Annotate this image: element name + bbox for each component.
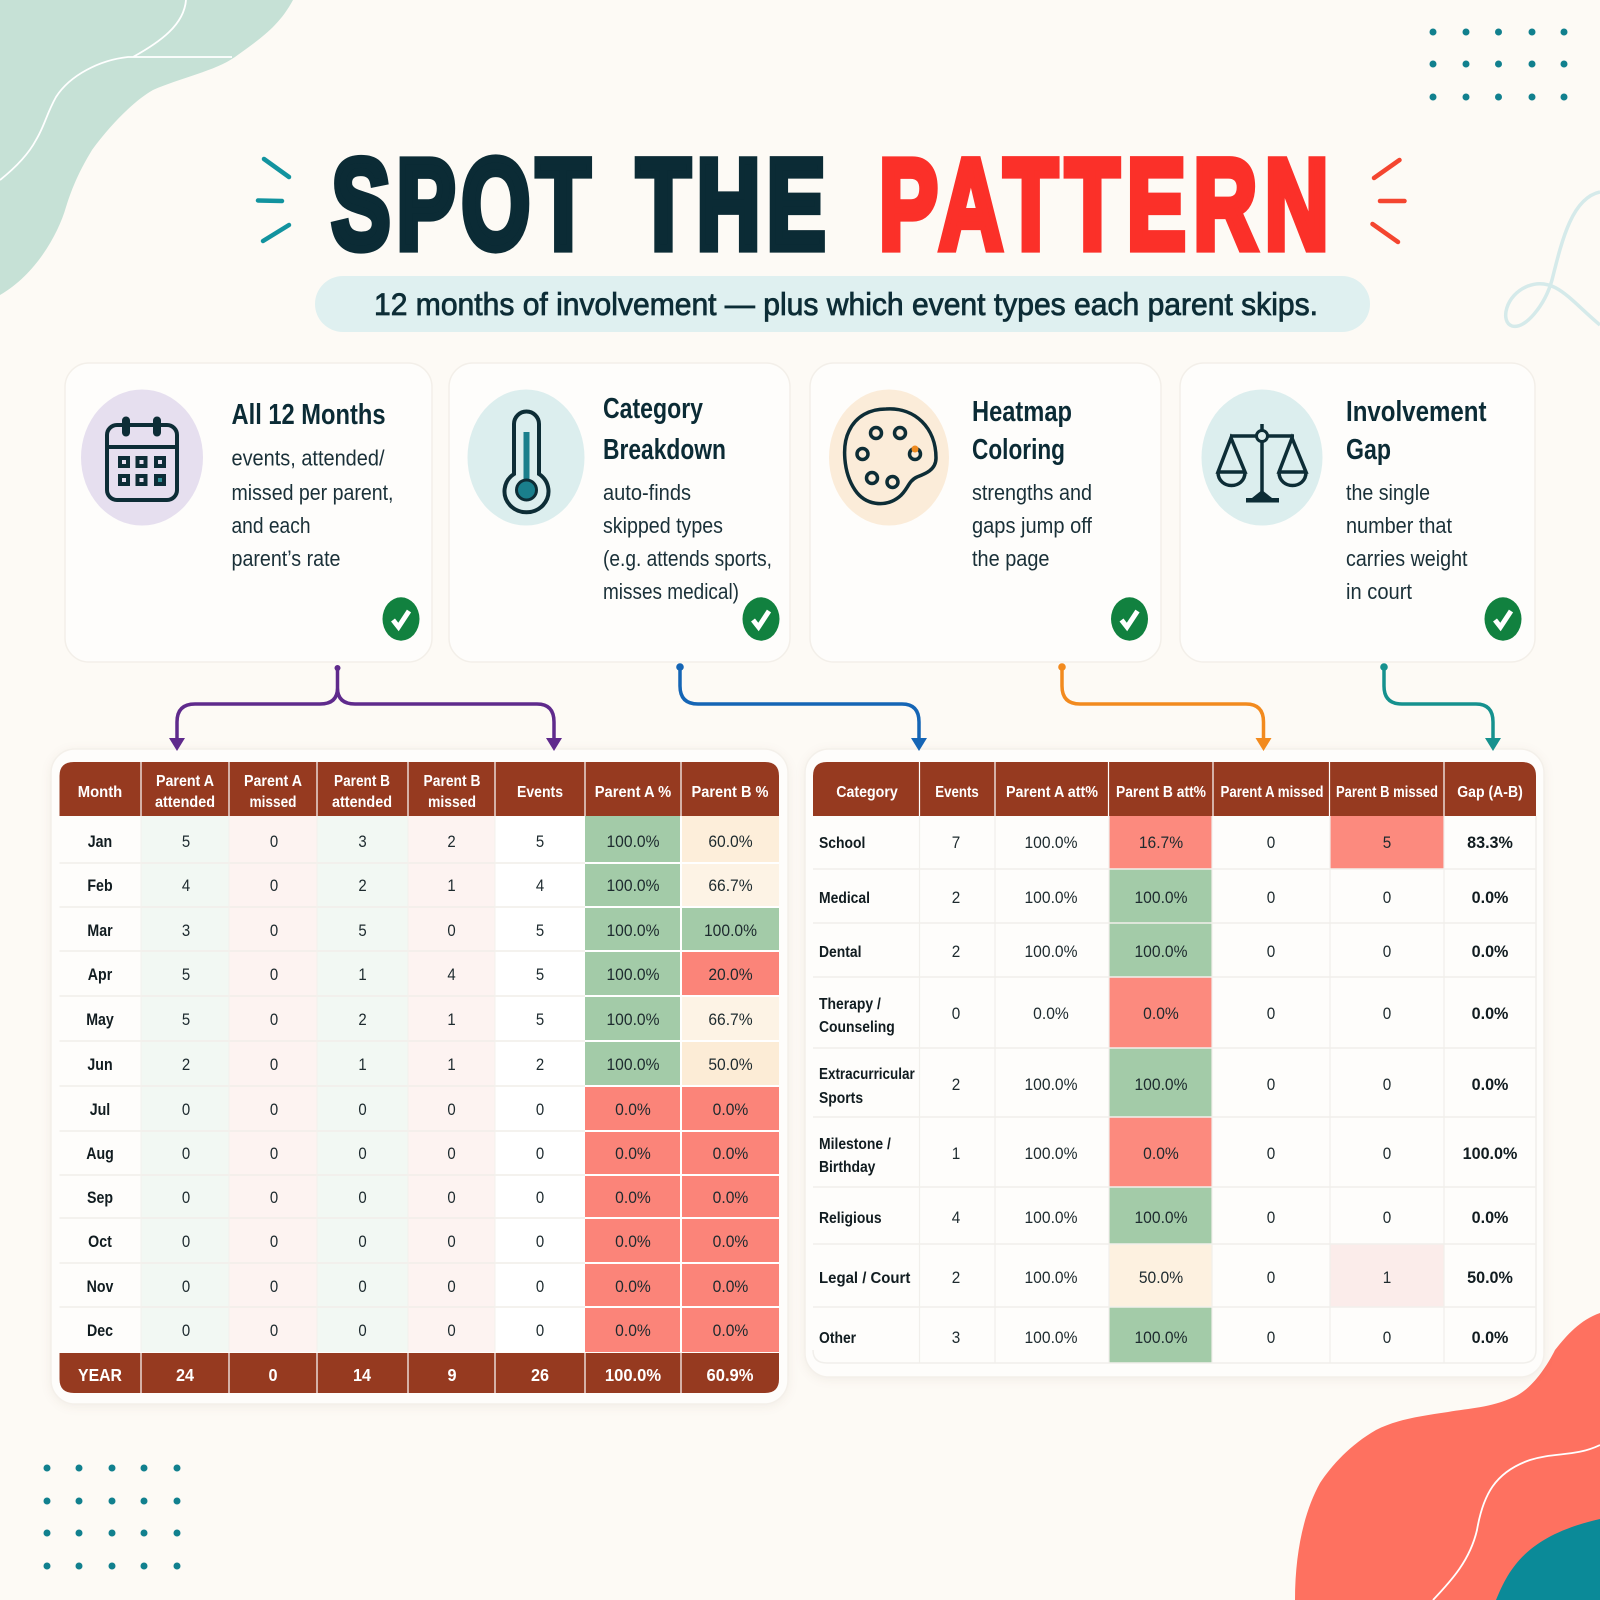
monthly table header row: Parent B [424, 773, 480, 790]
column: gap: 0.0% [1472, 888, 1509, 907]
column: parent a attendance: 0.0% [1033, 1004, 1069, 1023]
column: parent b attended: 0 [358, 1189, 367, 1207]
column: parent a percent: 100.0% [606, 921, 660, 940]
column: parent a percent: 0.0% [615, 1144, 651, 1163]
column: category: Counseling [819, 1018, 895, 1036]
monthly table header row: missed [250, 794, 296, 811]
column: parent b percent: 0.0% [713, 1100, 748, 1119]
panel: all 12 months [65, 363, 432, 662]
text block: missed per parent, [232, 480, 394, 505]
arrow: purple branching connector [169, 665, 562, 751]
column: events: 4 [952, 1208, 960, 1227]
column: category: Religious [819, 1209, 882, 1227]
column: category: Medical [819, 889, 870, 907]
dot grid: top right [1430, 28, 1568, 100]
column: parent b attended: 0 [358, 1322, 367, 1340]
text block: strengths and [972, 480, 1092, 505]
column: category: Milestone / [819, 1135, 892, 1153]
column: parent a missed: 0 [270, 1233, 278, 1251]
monthly table year total row: 100.0% [605, 1364, 661, 1385]
column: parent b missed: 0 [447, 1278, 456, 1296]
column: events: 1 [952, 1144, 960, 1163]
panel: heatmap coloring [810, 363, 1161, 662]
column: parent b missed: 1 [447, 877, 456, 895]
column: events: 0 [536, 1322, 544, 1340]
heading [603, 393, 726, 466]
column: parent a missed [1267, 833, 1275, 1347]
monthly table header row [60, 762, 779, 816]
column: month: Mar [87, 922, 113, 940]
column: parent b missed: 0 [447, 1233, 456, 1251]
column: events: 2 [952, 942, 960, 961]
text block: events, attended/ [232, 446, 385, 470]
column: parent a attendance: 100.0% [1024, 1268, 1078, 1287]
column: parent a missed: 0 [1267, 1075, 1275, 1094]
column: month: Jul [90, 1101, 110, 1119]
heading [972, 396, 1072, 466]
column: parent b attendance: 100.0% [1134, 1208, 1188, 1227]
column: events [536, 833, 544, 1340]
column: parent b percent: 66.7% [708, 1010, 753, 1029]
column: parent a attendance: 100.0% [1024, 1144, 1078, 1163]
column: parent a percent: 0.0% [615, 1321, 651, 1340]
heading [1346, 396, 1487, 466]
panel: involvement gap [1180, 363, 1535, 662]
column: gap [1463, 833, 1518, 1347]
monthly table year total row: 0 [268, 1365, 278, 1385]
column: parent b missed: 5 [1383, 833, 1391, 852]
column: parent a missed [270, 833, 278, 1340]
column: events: 2 [952, 1075, 960, 1094]
column: events: 2 [952, 888, 960, 907]
heading: Breakdown [603, 434, 726, 466]
column: parent a missed: 0 [1267, 1268, 1275, 1287]
column: month: Feb [87, 877, 113, 895]
subtitle pill: 12 months of involvement — plus which event types each parent skips. [374, 286, 1318, 322]
column: events: 4 [536, 877, 544, 895]
column: parent b attendance: 0.0% [1143, 1144, 1179, 1163]
column: parent a missed: 0 [1267, 1004, 1275, 1023]
column: parent b missed [1383, 833, 1391, 1347]
column: parent a attendance: 100.0% [1024, 833, 1078, 852]
heading: All 12 Months [232, 399, 386, 431]
column: parent b attended: 0 [358, 1145, 367, 1163]
column: month: Dec [87, 1322, 113, 1340]
column: parent b attended: 0 [358, 1101, 367, 1119]
column: parent a percent [606, 832, 660, 1340]
heading: Category [603, 393, 703, 425]
column: month [86, 833, 114, 1340]
monthly table header row: Parent A [244, 773, 302, 790]
monthly table year total row: 24 [176, 1365, 194, 1385]
column: parent b missed: 4 [447, 966, 456, 984]
column: events: 5 [536, 922, 544, 940]
icon: red accent ticks [1372, 160, 1404, 242]
column: parent a percent: 100.0% [606, 1010, 660, 1029]
background blob: bottom right coral and teal [1295, 1313, 1600, 1600]
column: parent a percent: 100.0% [606, 876, 660, 895]
column: parent a missed: 0 [270, 966, 278, 984]
column: parent b missed: 0 [1383, 1208, 1391, 1227]
column: parent b attended: 3 [358, 833, 367, 851]
text block: number that [1346, 513, 1452, 538]
subtitle pill [315, 276, 1370, 332]
column: parent b percent: 20.0% [708, 965, 753, 984]
column: parent b attendance: 0.0% [1143, 1004, 1179, 1023]
column: parent a attended: 0 [182, 1101, 190, 1119]
column: parent b percent: 0.0% [713, 1277, 748, 1296]
column: gap: 100.0% [1463, 1144, 1518, 1163]
column: gap: 0.0% [1472, 1075, 1509, 1094]
monthly table header row: attended [332, 794, 392, 811]
column: parent a attended: 5 [182, 833, 190, 851]
background blob: top left mint [0, 0, 293, 295]
column: category: Therapy / [819, 995, 882, 1013]
icon: calendar [81, 390, 203, 526]
column: parent a missed: 0 [270, 1011, 278, 1029]
text block: the page [972, 546, 1050, 571]
text block: auto-finds [603, 480, 691, 505]
text block: gaps jump off [972, 513, 1093, 538]
column: parent a attended: 5 [182, 966, 190, 984]
dot grid: bottom left [44, 1464, 180, 1570]
column: parent b missed: 0 [447, 1101, 456, 1119]
column: parent a attendance: 100.0% [1024, 1328, 1078, 1347]
monthly table header row: missed [428, 794, 476, 811]
heading: Coloring [972, 434, 1065, 466]
column: month: Oct [88, 1233, 112, 1251]
column: parent b percent: 66.7% [708, 876, 753, 895]
monthly table header row: Parent A % [595, 784, 671, 801]
monthly table year total row: 9 [447, 1365, 457, 1385]
column: events: 0 [536, 1145, 544, 1163]
column: parent a percent: 100.0% [606, 1055, 660, 1074]
category table header row: Category [836, 784, 898, 801]
text block: carries weight [1346, 546, 1468, 571]
column: month: Apr [88, 966, 112, 984]
column: parent b missed: 0 [447, 922, 456, 940]
text block: the single [1346, 480, 1430, 505]
column: parent b missed: 1 [1383, 1268, 1391, 1287]
icon: thermometer [468, 390, 584, 526]
monthly table header row: Events [517, 784, 563, 801]
monthly table year total row: YEAR [78, 1365, 122, 1385]
column: parent a attended: 0 [182, 1145, 190, 1163]
column: parent a attended: 0 [182, 1278, 190, 1296]
column: parent b percent [704, 832, 757, 1340]
heading: Gap [1346, 434, 1391, 466]
arrow: orange connector [1058, 663, 1272, 751]
column: parent b missed: 0 [447, 1189, 456, 1207]
column: parent b missed: 0 [1383, 1328, 1391, 1347]
column: parent b percent: 50.0% [708, 1055, 753, 1074]
column: parent a missed: 0 [1267, 1208, 1275, 1227]
column: category: Dental [819, 943, 862, 961]
title word: pattern: PATTERN [879, 133, 1329, 276]
column: parent a attended: 5 [182, 1011, 190, 1029]
column: parent a missed: 0 [270, 922, 278, 940]
column: parent a attended: 0 [182, 1233, 190, 1251]
text block: parent’s rate [232, 546, 340, 571]
column: parent a missed: 0 [270, 1101, 278, 1119]
column: parent b percent: 0.0% [713, 1232, 748, 1251]
category table header row: Parent A missed [1220, 784, 1324, 801]
column: gap: 0.0% [1472, 1328, 1509, 1347]
text block [1346, 480, 1468, 604]
column: parent b missed [447, 833, 456, 1340]
column: parent a missed: 0 [1267, 1144, 1275, 1163]
category table cell heat fills [813, 816, 1536, 1363]
arrow: blue connector [676, 663, 927, 751]
column: events: 0 [536, 1278, 544, 1296]
column: month: Sep [87, 1189, 113, 1207]
column: events: 0 [536, 1189, 544, 1207]
column: parent b attendance: 100.0% [1134, 1328, 1188, 1347]
monthly table header row: attended [155, 794, 215, 811]
category table header row [813, 762, 1536, 816]
panel: category breakdown [449, 363, 790, 662]
column: parent a attended: 0 [182, 1322, 190, 1340]
column: parent a percent: 100.0% [606, 832, 660, 851]
text block [972, 480, 1093, 571]
column: month: Jan [88, 833, 112, 851]
column: parent a attended: 2 [182, 1056, 190, 1074]
column: parent b missed: 1 [447, 1056, 456, 1074]
text block [232, 446, 394, 571]
column: parent b attendance: 100.0% [1134, 888, 1188, 907]
column: parent b attendance: 16.7% [1139, 833, 1183, 852]
column: month: Jun [87, 1056, 113, 1074]
panel: monthly table [51, 749, 788, 1404]
monthly table header row: Parent B [334, 773, 390, 790]
column: parent a missed: 0 [270, 1278, 278, 1296]
column: parent b percent: 0.0% [713, 1144, 748, 1163]
column: events: 5 [536, 833, 544, 851]
column: parent b attendance [1134, 833, 1188, 1347]
column: parent a missed: 0 [1267, 888, 1275, 907]
column: parent b attendance: 50.0% [1139, 1268, 1183, 1287]
monthly table year total row [60, 1353, 779, 1393]
title word: the: THE [636, 133, 826, 276]
column: events: 0 [536, 1233, 544, 1251]
column: category: Other [819, 1329, 856, 1347]
column: parent a missed: 0 [1267, 833, 1275, 852]
column: parent b missed: 0 [1383, 1075, 1391, 1094]
column: events: 0 [952, 1004, 960, 1023]
column: category: Extracurricular [819, 1065, 915, 1083]
text block: (e.g. attends sports, [603, 546, 772, 571]
monthly table cell heat fills [60, 816, 779, 1352]
column: parent b missed: 0 [1383, 1144, 1391, 1163]
column: parent b percent: 100.0% [704, 921, 757, 940]
icon: palette [829, 390, 949, 526]
column: parent a missed: 0 [270, 1189, 278, 1207]
column: month: Nov [87, 1278, 114, 1296]
column: gap: 0.0% [1472, 1208, 1509, 1227]
column: parent b missed: 0 [1383, 942, 1391, 961]
column: parent a missed: 0 [270, 1056, 278, 1074]
column: parent a attended: 4 [182, 877, 190, 895]
category table header row: Parent B att% [1116, 784, 1206, 801]
monthly table year total row: 60.9% [707, 1364, 753, 1385]
column: parent b missed: 0 [447, 1322, 456, 1340]
column: parent b percent: 0.0% [713, 1321, 748, 1340]
column: category: Sports [819, 1089, 863, 1107]
text block: skipped types [603, 513, 723, 538]
column: parent b missed: 0 [1383, 1004, 1391, 1023]
column: gap: 0.0% [1472, 1004, 1509, 1023]
column: parent b missed: 0 [447, 1145, 456, 1163]
column: parent b attended: 0 [358, 1233, 367, 1251]
arrow: teal connector [1380, 663, 1501, 751]
column: category: Birthday [819, 1158, 876, 1176]
category table header row: Gap (A-B) [1457, 784, 1523, 801]
column: parent a percent: 0.0% [615, 1188, 651, 1207]
title word: spot: SPOT [332, 133, 590, 276]
monthly table header row: Month [78, 784, 122, 801]
column: parent a attended [182, 833, 190, 1340]
column: parent a missed: 0 [270, 1145, 278, 1163]
column: parent b percent: 60.0% [708, 832, 753, 851]
column: parent a attendance: 100.0% [1024, 942, 1078, 961]
column: month: Aug [86, 1145, 114, 1163]
column: parent a percent: 100.0% [606, 965, 660, 984]
column: parent b attended [358, 833, 367, 1340]
column: parent a percent: 0.0% [615, 1277, 651, 1296]
column: gap: 0.0% [1472, 942, 1509, 961]
column: category: Legal / Court [819, 1269, 910, 1287]
category table header row: Parent B missed [1336, 784, 1438, 801]
icon: check badge [382, 597, 420, 641]
column: events: 0 [536, 1101, 544, 1119]
column: category [819, 834, 915, 1347]
column: parent b attended: 1 [358, 966, 367, 984]
column: gap: 50.0% [1467, 1268, 1513, 1287]
column: parent a attended: 0 [182, 1189, 190, 1207]
category table header row: Events [935, 784, 979, 801]
text block: misses medical) [603, 579, 739, 604]
icon: teal accent ticks [258, 159, 289, 241]
category table header row: Parent A att% [1006, 784, 1098, 801]
monthly table year total row: 26 [531, 1365, 549, 1385]
column: events: 5 [536, 1011, 544, 1029]
column: parent a missed: 0 [1267, 942, 1275, 961]
monthly table header row: Parent A [156, 773, 214, 790]
column: parent a missed: 0 [1267, 1328, 1275, 1347]
heading: Heatmap [972, 396, 1072, 428]
text block: in court [1346, 579, 1412, 604]
column: events: 2 [536, 1056, 544, 1074]
monthly table header row: Parent B % [692, 784, 768, 801]
column: parent b attendance: 100.0% [1134, 942, 1188, 961]
column: parent b attended: 2 [358, 1011, 367, 1029]
column: events: 3 [952, 1328, 960, 1347]
column: month: May [86, 1011, 114, 1029]
column: parent b missed: 1 [447, 1011, 456, 1029]
text block [603, 480, 772, 604]
column: events [952, 833, 960, 1347]
icon: check badge [742, 597, 780, 641]
column: parent a attendance: 100.0% [1024, 1208, 1078, 1227]
monthly table year total row: 14 [353, 1365, 371, 1385]
column: events: 5 [536, 966, 544, 984]
column: parent b attended: 1 [358, 1056, 367, 1074]
column: parent a missed: 0 [270, 833, 278, 851]
column: parent b missed: 0 [1383, 888, 1391, 907]
column: parent b missed: 2 [447, 833, 456, 851]
panel: category table [805, 749, 1544, 1377]
icon: check badge [1111, 597, 1148, 641]
column: parent b percent: 0.0% [713, 1188, 748, 1207]
icon: balance scale [1202, 390, 1322, 526]
column: parent a attendance: 100.0% [1024, 1075, 1078, 1094]
column: parent b attended: 0 [358, 1278, 367, 1296]
column: parent a attended: 3 [182, 922, 190, 940]
column: parent a missed: 0 [270, 1322, 278, 1340]
column: parent a attendance [1024, 833, 1078, 1347]
column: parent b attended: 2 [358, 877, 367, 895]
text block: and each [232, 513, 310, 538]
column: parent a percent: 0.0% [615, 1100, 651, 1119]
decorative curl: right edge [1506, 192, 1600, 326]
title [258, 133, 1404, 276]
column: parent a missed: 0 [270, 877, 278, 895]
icon: check badge [1484, 597, 1522, 641]
column: events: 2 [952, 1268, 960, 1287]
column: parent b attended: 5 [358, 922, 367, 940]
column: category: School [819, 834, 865, 852]
column: gap: 83.3% [1467, 833, 1513, 852]
column: parent a percent: 0.0% [615, 1232, 651, 1251]
column: events: 7 [952, 833, 960, 852]
column: parent a attendance: 100.0% [1024, 888, 1078, 907]
heading: Involvement [1346, 396, 1487, 428]
column: parent b attendance: 100.0% [1134, 1075, 1188, 1094]
